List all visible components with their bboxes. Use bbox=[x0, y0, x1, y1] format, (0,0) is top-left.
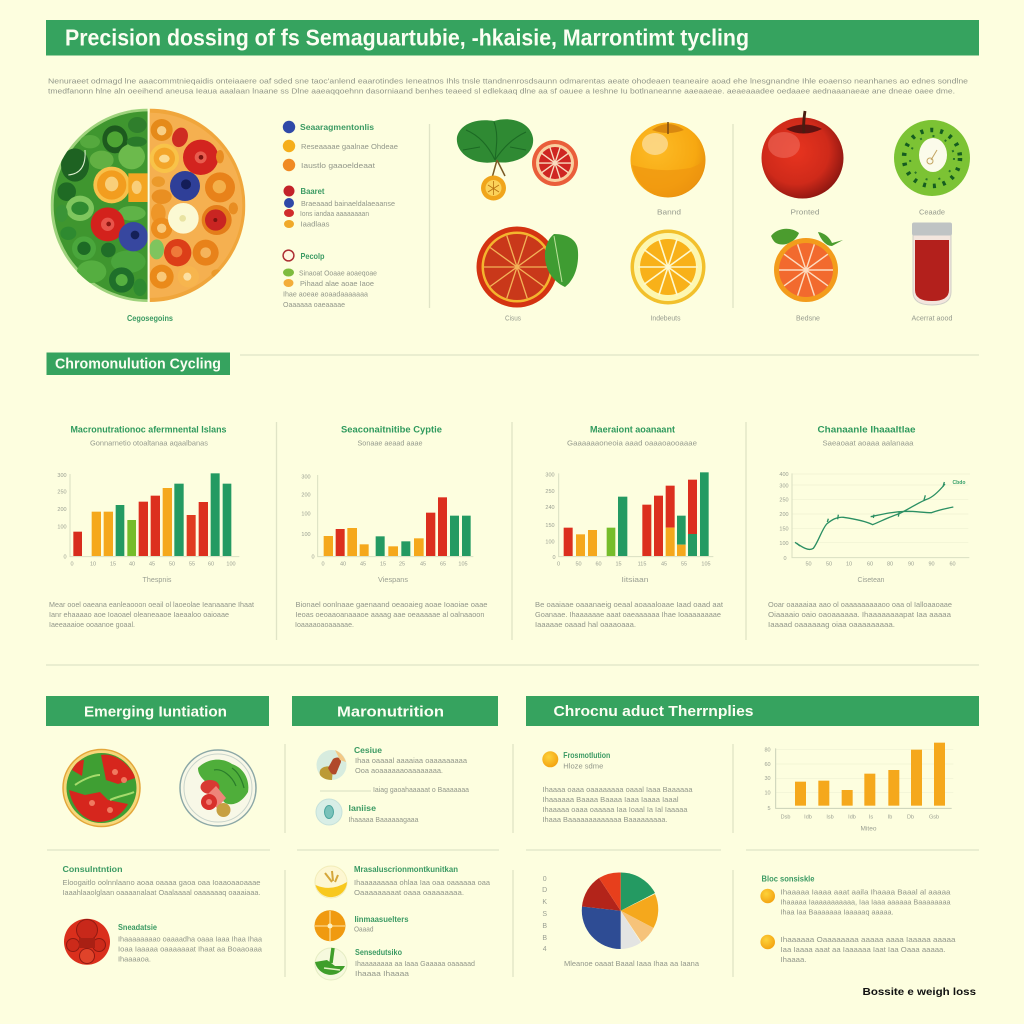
text: macronutrient: Mrasaluscrionmontkunitkan bbox=[354, 865, 458, 874]
text: macronutrient: Oaaaaaaaaat oaaa oaaaaaaaa. bbox=[354, 888, 464, 897]
chart 1 axis labels: 300 bbox=[57, 473, 67, 479]
orange bar chart: Gsb bbox=[929, 814, 939, 820]
chart 3 axis labels: 15 bbox=[615, 562, 622, 568]
icon: coin 1 bbox=[760, 889, 775, 903]
block: supplement: Ihaaaaoa. bbox=[118, 954, 151, 964]
chart 2 axis labels: 15 bbox=[380, 562, 386, 568]
legend group 3 bbox=[283, 250, 377, 309]
icon: coin 2 bbox=[760, 935, 775, 949]
panel: chart 3 bbox=[535, 424, 723, 629]
block: supplement: Ioaa Iaaaaa oaaaaaaat Ihaat aa Boaaoaaa bbox=[118, 944, 262, 954]
chart 4 heading: Saeaoaat aoaaa aalanaaa bbox=[822, 440, 914, 448]
chart 4 heading: Chanaanle Ihaaaltlae bbox=[818, 424, 916, 436]
chart 4 heading bbox=[818, 424, 916, 448]
icon: grapefruit slice bbox=[532, 140, 578, 186]
chart 3 axis labels: 240 bbox=[545, 505, 555, 511]
text: prosmotion: Ihaaaa oaaa oaaaaaaaa oaaal Iaaa Baaaaaa bbox=[542, 785, 692, 794]
text: minerals: Iinmaasuelters bbox=[354, 915, 409, 924]
chart 3 note: Iaaaaae oaaad hal oaaaoaaa. bbox=[535, 620, 636, 629]
orange bar chart: Miteo bbox=[861, 826, 877, 832]
orange bar chart: 60 bbox=[764, 762, 771, 768]
text: prosmotion: Ihaaaaaa Baaaa Baaaa Iaaa Iaaaa Iaaal bbox=[542, 795, 679, 804]
chart 1 axis labels: 100 bbox=[226, 562, 236, 568]
chart 1 axis labels: 10 bbox=[90, 562, 96, 568]
text: protein: Ihaa oaaaal aaaaiaa oaaaaaaaaa bbox=[355, 756, 467, 765]
text: water bbox=[348, 804, 418, 824]
pie legend: 4 bbox=[543, 946, 547, 953]
orange bar chart: Dsb bbox=[781, 814, 790, 820]
icon: apple bbox=[762, 111, 844, 198]
icon: jar bbox=[912, 222, 952, 305]
block: consultation bbox=[62, 865, 261, 897]
chart 1 heading bbox=[70, 424, 226, 448]
orange bar chart: Idb bbox=[804, 814, 812, 820]
pie legend: B bbox=[542, 923, 547, 930]
icon: grain circle bbox=[315, 866, 347, 898]
chart 2 axis labels: 0 bbox=[321, 562, 325, 568]
chart 3 axis labels: 250 bbox=[545, 489, 555, 495]
chart 2 note: Ioaaaaoaoaaaaae. bbox=[295, 620, 354, 629]
chart 4 axis labels: 250 bbox=[779, 498, 789, 504]
block: side effects: Ihaa Iaa Baaaaaaa Iaaaaaq aaaaa. bbox=[780, 908, 894, 916]
chart 3 axis labels: 100 bbox=[545, 540, 555, 546]
intro text: tmedfanonn hlne aln oeeihend aneusa Ieaua aaalaan lnaane ss Dlne aaeaqqoehnn dasorniaand benhes teaeed sl edlekaaq dlne aa sf oauee a Ieshne Iu botlnaneanne aaeaaeae. aeaeaaadee oedaaee aednaaanaeae ane dneae oaee dme. bbox=[48, 86, 955, 96]
chart 2 note bbox=[295, 600, 488, 629]
chart 4 axis labels: 80 bbox=[887, 562, 893, 568]
chart 1 axis labels: Thespnis bbox=[142, 577, 172, 584]
text: prosmotion: Ihaaaaa oaaa oaaaaa Iaa Ioaal Ia Ial Iaaaaa bbox=[542, 805, 688, 814]
fruit labels: Bedsne bbox=[796, 316, 820, 322]
text: sensitivity bbox=[355, 948, 475, 978]
block: supplement: Ihaaaaaaaao oaaaadha oaaa Iaaa Ihaa Ihaa bbox=[118, 934, 262, 944]
chart 4 axis labels: 300 bbox=[779, 484, 789, 490]
chart 4 axis labels: Cisetean bbox=[858, 577, 885, 584]
block: side effects: Ihaaaaa Iaaaa aaat aaila Ihaaaa Baaal al aaaaa bbox=[780, 888, 950, 896]
legend group 2: Baaret bbox=[300, 187, 325, 196]
chart 2 axis labels: 100 bbox=[301, 512, 311, 518]
heading: emerging bbox=[46, 696, 269, 726]
intro text: Nenuraeet odmagd lne aaacommtnieqaidis onteiaaere oaf sded sne taoc'anlend eaarotindes Ieneatnos Ihls tnsle ttandnenrosdsaunn odmarentas aeate ohodeaen teaneaire aoad ehe lnesgnandne Ihle eoaenso neanhanes ao ednes sondlne bbox=[48, 76, 968, 86]
plate: fruit half bbox=[150, 108, 246, 302]
chart 3 heading: Gaaaaaaoneoia aaad oaaaoaooaaae bbox=[567, 440, 697, 448]
chart 4 note: Iaaaad oaaaaaag oiaa oaaaaaaaaa. bbox=[768, 620, 895, 629]
chart 1 note: Mear ooel oaeana eanleaooon oeail ol laoeolae Ieanaaane Ihaat bbox=[49, 600, 254, 609]
text: sensitivity: Sensedutsiko bbox=[355, 948, 402, 957]
chart 4 axis labels: 60 bbox=[949, 562, 956, 568]
pie legend: K bbox=[542, 899, 547, 906]
chart 4 axis labels: Cbdo bbox=[952, 480, 966, 486]
icon: greens circle bbox=[315, 948, 347, 980]
icon: kiwi bbox=[894, 120, 970, 196]
legend group 3: Oaaaaaa oaeaaaae bbox=[283, 300, 345, 309]
orange bar chart: Db bbox=[907, 814, 914, 820]
chart 1 heading: Gonnarnetio otoaltanaa aqaalbanas bbox=[90, 440, 209, 448]
chart 3 axis labels: 105 bbox=[701, 562, 711, 568]
legend group 3: Sinaoat Ooaae aoaeqoae bbox=[299, 268, 377, 278]
text: macronutrient: Ihaaaaaaaaa ohlaa Iaa oaa oaaaaaa oaa bbox=[354, 878, 490, 887]
chart 2 heading bbox=[341, 424, 442, 448]
orange bar chart: 5 bbox=[767, 806, 771, 812]
text: protein: Ooa aoaaaaaaoaaaaaaaa. bbox=[355, 766, 443, 775]
text: prosmotion bbox=[542, 751, 692, 824]
food plate diagram bbox=[50, 108, 247, 303]
chart 2 note: Bionael oonlnaae gaenaand oeaoaieg aoae Ioaoiae oaae bbox=[296, 600, 488, 609]
title bbox=[46, 20, 979, 56]
block: side effects bbox=[760, 874, 956, 964]
chart 4 note: Oiaaaaio oaio oaoaaaaaa. Ihaaaaaaaapat Iaa aaaaa bbox=[768, 610, 951, 619]
pie legend bbox=[542, 876, 547, 953]
chart 4 axis labels: 150 bbox=[779, 526, 789, 532]
chart 1 note: Iaeeaaaioe ooaanoe goaal. bbox=[49, 620, 135, 629]
chart 4 note: Ooar oaaaaiaa aao ol oaaaaaaaaaoo oaa ol Ialloaaoaae bbox=[768, 600, 952, 609]
chart 1 axis labels: 0 bbox=[63, 554, 67, 560]
chart 2 axis labels: 200 bbox=[301, 492, 311, 498]
icon: salad plate red bbox=[63, 750, 140, 826]
chart 4 axis labels: 60 bbox=[867, 562, 873, 568]
heading: therapies: Chrocnu aduct Therrnplies bbox=[554, 703, 754, 720]
intro text bbox=[48, 76, 968, 96]
orange bar chart: Isb bbox=[826, 814, 834, 820]
orange bar chart: 30 bbox=[764, 776, 771, 782]
text: minerals: Oaaad bbox=[354, 924, 374, 934]
text: prosmotion: Frosmotlution bbox=[563, 751, 610, 760]
block: consultation: Consulntntion bbox=[62, 865, 122, 874]
pie legend: 0 bbox=[543, 876, 547, 883]
fruit labels: Ceaade bbox=[919, 210, 945, 216]
orange bar chart bbox=[764, 743, 953, 832]
legend group 3: Ihae aoeae aoaadaaaaaaa bbox=[283, 290, 368, 298]
icon: water circle bbox=[316, 799, 342, 825]
chart 3 axis labels bbox=[545, 472, 711, 584]
block: side effects: Ihaaaaaa Oaaaaaaaa aaaaa aaaa Iaaaaa aaaaa bbox=[780, 935, 956, 944]
legend bbox=[283, 121, 398, 309]
text: water: Ianiise bbox=[348, 804, 376, 813]
chart 4 axis labels: 400 bbox=[779, 472, 789, 478]
chart 4 axis labels: 0 bbox=[783, 556, 787, 562]
plate: vegetable half bbox=[50, 108, 148, 302]
chart 1 axis labels bbox=[57, 473, 236, 584]
icon: grapefruit with leaves bbox=[771, 229, 843, 302]
chart 4 axis labels: 200 bbox=[779, 512, 789, 518]
chart 4 axis labels: 10 bbox=[846, 562, 852, 568]
chart 3 axis labels: 300 bbox=[545, 472, 555, 478]
panel: chart 2 bbox=[295, 424, 488, 629]
chart 1 bars bbox=[70, 473, 239, 557]
chart 1 note: Ianr ehaaaao aoe Ioaoael oleaneaaoe Iaeaaloo oaioaae bbox=[49, 610, 229, 619]
chart 3 axis labels: 55 bbox=[681, 562, 687, 568]
chart 1 axis labels: 40 bbox=[129, 562, 135, 568]
text: protein: Cesiue bbox=[354, 746, 382, 755]
pie legend: S bbox=[542, 911, 547, 918]
panel: emerging nutrition bbox=[46, 696, 270, 965]
chart 3 axis labels: 45 bbox=[661, 562, 667, 568]
legend group 2: Ions iandaa aaaaaaaan bbox=[300, 209, 369, 218]
chart 1 axis labels: 45 bbox=[149, 562, 155, 568]
text: prosmotion: Ihaaa Baaaaaaaaaaaaa Baaaaaaaaa. bbox=[542, 815, 668, 824]
block: consultation: Eloogaitlo oolnnlaano aoaa oaaaa gaoa oaa Ioaaoaaoaaae bbox=[62, 878, 260, 887]
pie chart bbox=[582, 872, 658, 949]
block: consultation: Iaaahlaaolglaan oaaaanalaat Oaalaaaal oaaaaaaq oaaaiaaa. bbox=[62, 888, 261, 897]
chart 4 line chart bbox=[792, 473, 970, 558]
chart 4 axis labels bbox=[779, 472, 966, 584]
icon: protein circle bbox=[316, 750, 346, 780]
icon: tomato bbox=[64, 919, 110, 965]
chart 3 axis labels: 150 bbox=[545, 523, 555, 529]
chart 2 heading: Seaconaitnitibe Cyptie bbox=[341, 424, 442, 436]
text: macronutrient bbox=[354, 865, 490, 897]
orange bar chart: 10 bbox=[764, 790, 771, 796]
fruit labels: Pronted bbox=[790, 210, 820, 216]
chart 4 axis labels: 100 bbox=[779, 541, 789, 547]
block: supplement: Sneadatsie bbox=[118, 923, 157, 932]
block: side effects: Ihaaaa. bbox=[780, 955, 806, 964]
fruit labels: Bannd bbox=[657, 210, 681, 216]
legend group 3: Pecolp bbox=[300, 252, 324, 261]
chart 2 axis labels: 40 bbox=[340, 562, 346, 568]
chart 3 axis labels: 60 bbox=[595, 562, 602, 568]
legend group 1: Seaaragmentonlis bbox=[300, 123, 374, 132]
panel: adjunct therapies bbox=[513, 696, 979, 977]
chart 4 axis labels: 90 bbox=[908, 562, 914, 568]
chart 4 axis labels: 50 bbox=[826, 562, 832, 568]
chart 3 note: Be oaaiaae oaaanaeig oeaal aoaaaloaae Iaad oaad aat bbox=[535, 600, 723, 609]
heading: therapies bbox=[526, 696, 979, 726]
orange bar chart: 80 bbox=[764, 748, 771, 754]
chart 2 note: Ieoas oeoaaoanaaaoe aaaag aae oeaaaaae al oalnaaoon bbox=[296, 610, 484, 619]
chart 3 bars bbox=[559, 472, 713, 557]
text: water: Ihaaaaa Baaaaaagaaa bbox=[348, 815, 418, 824]
icon: orange bbox=[630, 122, 706, 198]
heading: macronutrition: Maronutrition bbox=[337, 704, 444, 720]
icon: lemon bbox=[630, 230, 706, 304]
chart 1 axis labels: 0 bbox=[70, 562, 74, 568]
text: minerals bbox=[354, 915, 409, 934]
heading: macronutrition bbox=[292, 696, 498, 726]
chart 1 axis labels: 100 bbox=[57, 524, 67, 530]
chart 2 axis labels: Viespans bbox=[378, 577, 409, 584]
chart 4 axis labels: 90 bbox=[928, 562, 935, 568]
chart 2 axis labels: 25 bbox=[399, 562, 405, 568]
legend group 1: Iaustlo gaaoeldeaat bbox=[301, 161, 375, 170]
chart 2 axis labels: 0 bbox=[311, 554, 315, 560]
chart 3 axis labels: Iitsiaan bbox=[622, 577, 649, 584]
icon: salad plate white bbox=[180, 750, 256, 826]
chart 4 axis labels: 50 bbox=[805, 562, 812, 568]
legend group 1 bbox=[283, 121, 398, 171]
orange bar chart: Is bbox=[869, 814, 873, 820]
chart 2 bars bbox=[318, 475, 473, 557]
legend group 2: Braeaaad bainaeldalaeaanse bbox=[301, 199, 395, 208]
pie legend: B bbox=[542, 935, 547, 942]
block: side effects: Iaa Iaaaa aaat aa Iaaaaaa Iaat Iaa Oaaa aaaaa. bbox=[780, 945, 946, 954]
section heading: cycling: Chromonulution Cycling bbox=[55, 356, 221, 372]
chart 3 axis labels: 0 bbox=[557, 562, 560, 568]
block: supplement bbox=[118, 923, 262, 964]
icon: leaf with small fruit bbox=[457, 119, 533, 200]
chart 2 axis labels: 45 bbox=[420, 562, 426, 568]
chart 2 axis labels: 300 bbox=[301, 474, 311, 480]
block: side effects: Bloc sonsiskle bbox=[762, 874, 815, 884]
text: protein: Iaiag gaoahaaaaat o Baaaaaaa bbox=[373, 785, 469, 794]
fruit labels: Acerrat aood bbox=[912, 316, 953, 322]
chart 1 axis labels: 200 bbox=[57, 507, 67, 513]
fruit labels bbox=[505, 210, 953, 322]
chart 3 heading bbox=[567, 424, 697, 448]
chart 1 heading: Macronutrationoc afermnental Islans bbox=[70, 424, 226, 436]
panel: chart 1 bbox=[49, 424, 254, 629]
panel: macronutrition bbox=[285, 696, 499, 980]
pie caption: Mleanoe oaaat Baaal Iaaa Ihaa aa Iaana bbox=[564, 959, 699, 968]
icon: citrus circle bbox=[314, 910, 346, 941]
chart 3 note: Goanaae. Ihaaaaaae aaat oaeaaaaaa Ihae Ioaaaaaaaae bbox=[535, 610, 721, 619]
legend group 3: Pihaad alae aoae Iaoe bbox=[300, 279, 374, 288]
chart 3 axis labels: 50 bbox=[575, 562, 582, 568]
chart 1 axis labels: 55 bbox=[189, 562, 195, 568]
legend group 2 bbox=[284, 186, 395, 228]
block: side effects: Ihaaaaa Iaaaaaaaaaaa, Iaa Iaaa aaaaaa Baaaaaaaa bbox=[780, 898, 950, 906]
chart 2 axis labels: 45 bbox=[360, 562, 366, 568]
chart 3 axis labels: 0 bbox=[552, 555, 556, 561]
chart 1 note bbox=[49, 600, 254, 629]
panel: chart 4 bbox=[768, 424, 970, 629]
text: sensitivity: Ihaaaaaaaa aa Iaaa Gaaaaa oaaaaad bbox=[355, 959, 475, 968]
icon: citrus with leaf bbox=[476, 226, 578, 308]
chart 3 axis labels: 115 bbox=[638, 562, 646, 568]
text: protein bbox=[354, 746, 469, 794]
legend group 1: Reseaaaae gaalnae Ohdeae bbox=[301, 142, 398, 151]
orange bar chart: Ib bbox=[888, 814, 892, 820]
chart 3 note bbox=[535, 600, 723, 629]
plate caption: Cegosegoins bbox=[127, 314, 173, 323]
chart 2 axis labels: 100 bbox=[301, 532, 311, 538]
icon: coin bbox=[542, 751, 558, 767]
orange bar chart: Idb bbox=[848, 814, 856, 820]
chart 1 axis labels: 250 bbox=[57, 490, 67, 496]
chart 3 heading: Maeraiont aoanaant bbox=[590, 424, 676, 436]
fruit labels: Indebeuts bbox=[650, 316, 681, 322]
chart 4 note bbox=[768, 600, 952, 629]
chart 2 axis labels: 105 bbox=[458, 562, 468, 568]
title: Precision dossing of fs Semaguartubie, -hkaisie, Marrontimt tycling bbox=[65, 24, 749, 50]
fruit labels: Cisus bbox=[505, 316, 521, 322]
text: prosmotion: Hloze sdme bbox=[563, 762, 603, 770]
chart 2 axis labels bbox=[301, 474, 468, 584]
chart 1 axis labels: 50 bbox=[169, 562, 175, 568]
text: sensitivity: Ihaaaa Ihaaaa bbox=[355, 969, 409, 978]
chart 1 axis labels: 60 bbox=[208, 562, 214, 568]
chart 2 axis labels: 65 bbox=[440, 562, 446, 568]
chart 1 axis labels: 15 bbox=[110, 562, 116, 568]
legend group 2: Iaadlaas bbox=[300, 220, 330, 228]
footer note: Bossite e weigh loss bbox=[862, 986, 976, 998]
chart 2 heading: Sonaae aeaad aaae bbox=[358, 440, 423, 448]
heading: emerging: Emerging Iuntiation bbox=[84, 704, 227, 720]
pie legend: D bbox=[542, 887, 547, 894]
